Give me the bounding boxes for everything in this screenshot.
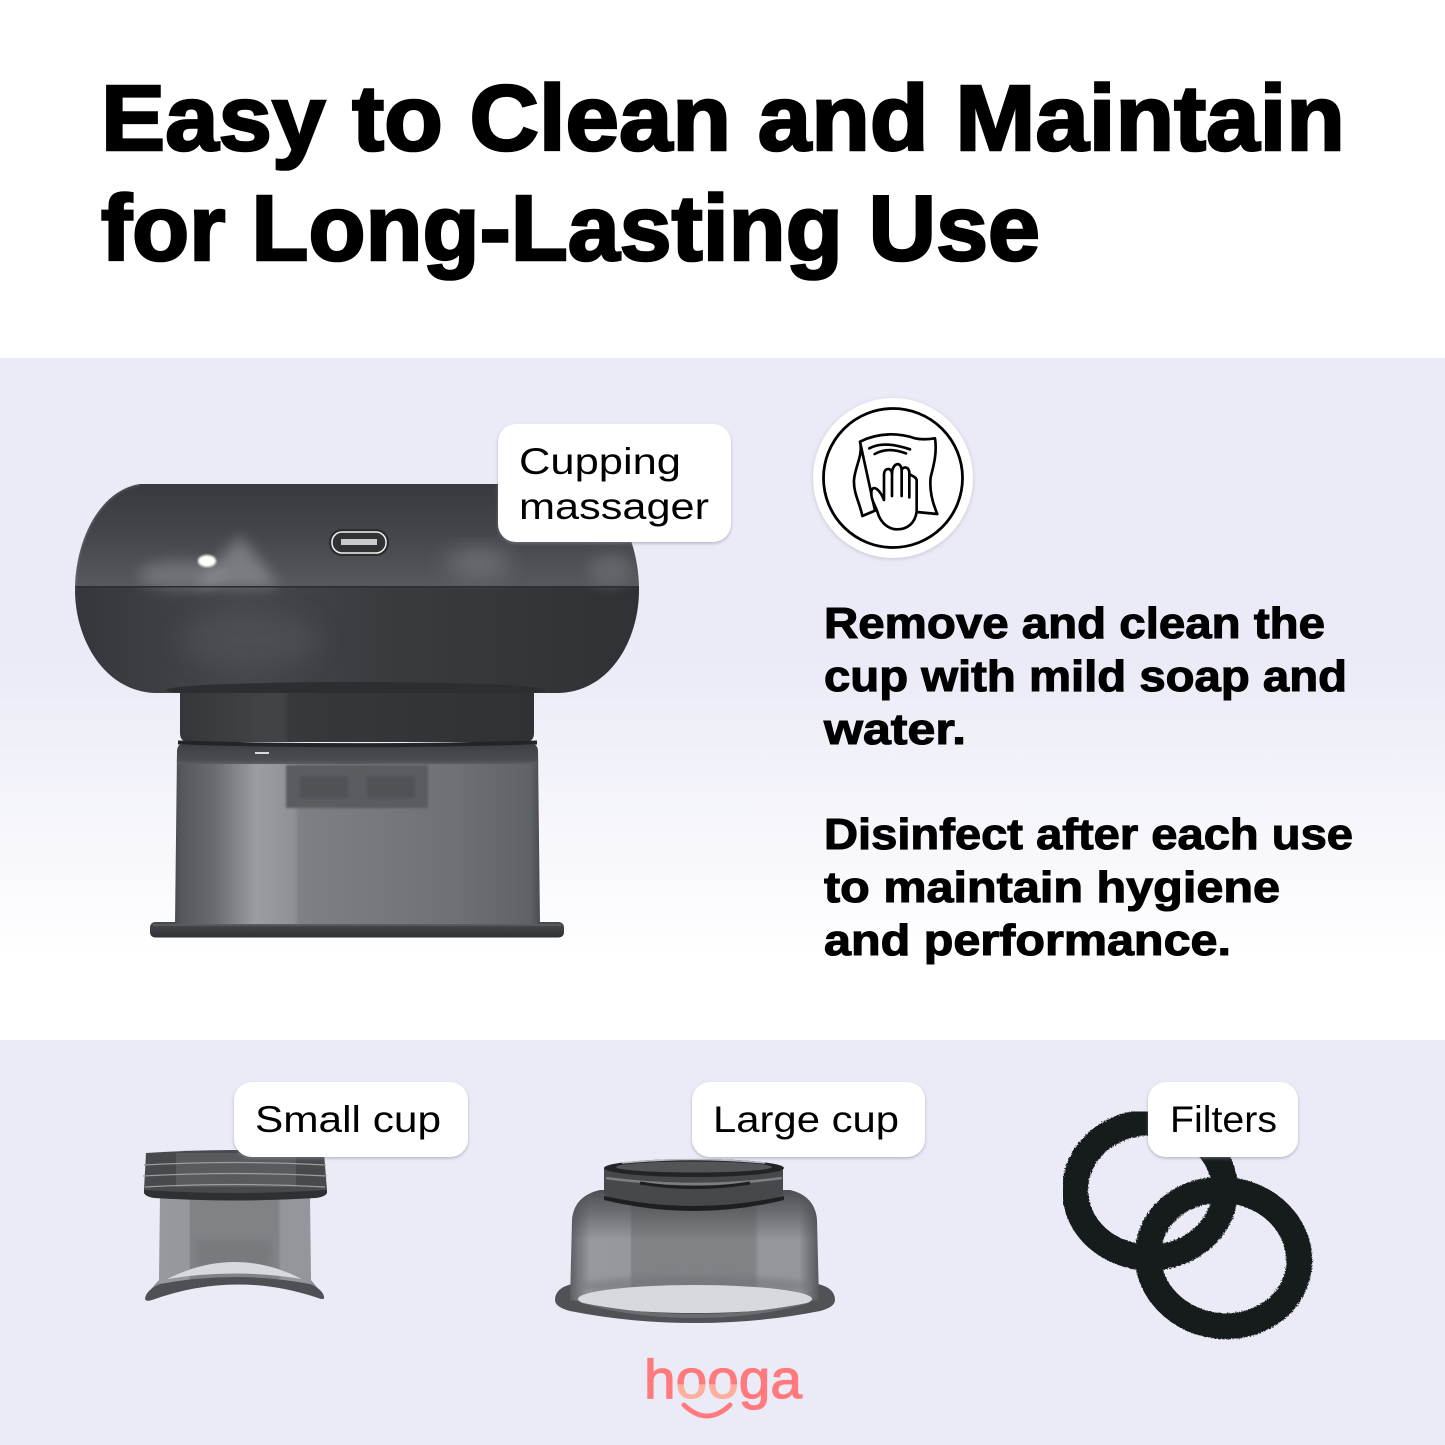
large cup flange <box>555 1284 835 1323</box>
large cup dome <box>570 1190 819 1308</box>
highlight spot <box>198 555 216 567</box>
text block: cleaning instructions: Disinfect after each use <box>824 810 1353 859</box>
title <box>101 66 1345 280</box>
large cup rim shading <box>578 1302 812 1318</box>
title: for Long-Lasting Use <box>101 176 1040 280</box>
USB-C port <box>329 529 389 556</box>
small cup saddle rim <box>145 1277 324 1301</box>
label: Cupping massager: Cupping <box>519 441 681 482</box>
text block: cleaning instructions: to maintain hygiene <box>824 863 1280 912</box>
product: large cup <box>555 1159 835 1323</box>
label: Small cup: Small cup <box>255 1099 441 1140</box>
text block: cleaning instructions: water. <box>823 705 966 754</box>
filter ring back <box>1075 1122 1225 1258</box>
panel: main product background <box>0 358 1445 1040</box>
massager base flange <box>150 922 564 938</box>
icon: hand wiping with cloth <box>813 398 973 558</box>
product: filter rings <box>1075 1122 1310 1338</box>
label: Large cup <box>692 1082 925 1157</box>
label: Small cup <box>234 1082 468 1157</box>
massager head <box>70 480 645 698</box>
product: cupping massager <box>70 480 645 938</box>
logo: hooga: hooga <box>644 1348 802 1410</box>
label: Filters <box>1148 1082 1298 1157</box>
massager neck <box>180 692 534 742</box>
label: Cupping massager <box>498 424 731 542</box>
large cup opening <box>578 1285 812 1313</box>
massager transparent cup <box>170 743 545 925</box>
label: Large cup: Large cup <box>713 1099 899 1140</box>
text block: cleaning instructions: and performance. <box>824 916 1231 965</box>
label: Filters: Filters <box>1170 1099 1277 1140</box>
product: small cup <box>143 1150 327 1301</box>
filter ring front <box>1137 1178 1310 1338</box>
text block: cleaning instructions <box>823 599 1353 965</box>
title: Easy to Clean and Maintain <box>101 66 1345 170</box>
text block: cleaning instructions: Remove and clean the <box>824 599 1325 648</box>
small cup threaded collar <box>143 1150 327 1200</box>
panel: accessories background <box>0 1040 1445 1445</box>
text block: cleaning instructions: cup with mild soap and <box>824 652 1347 701</box>
label: Cupping massager: massager <box>519 486 709 527</box>
logo smile <box>684 1405 730 1416</box>
small cup body <box>146 1196 324 1300</box>
large cup threaded neck <box>604 1159 784 1211</box>
